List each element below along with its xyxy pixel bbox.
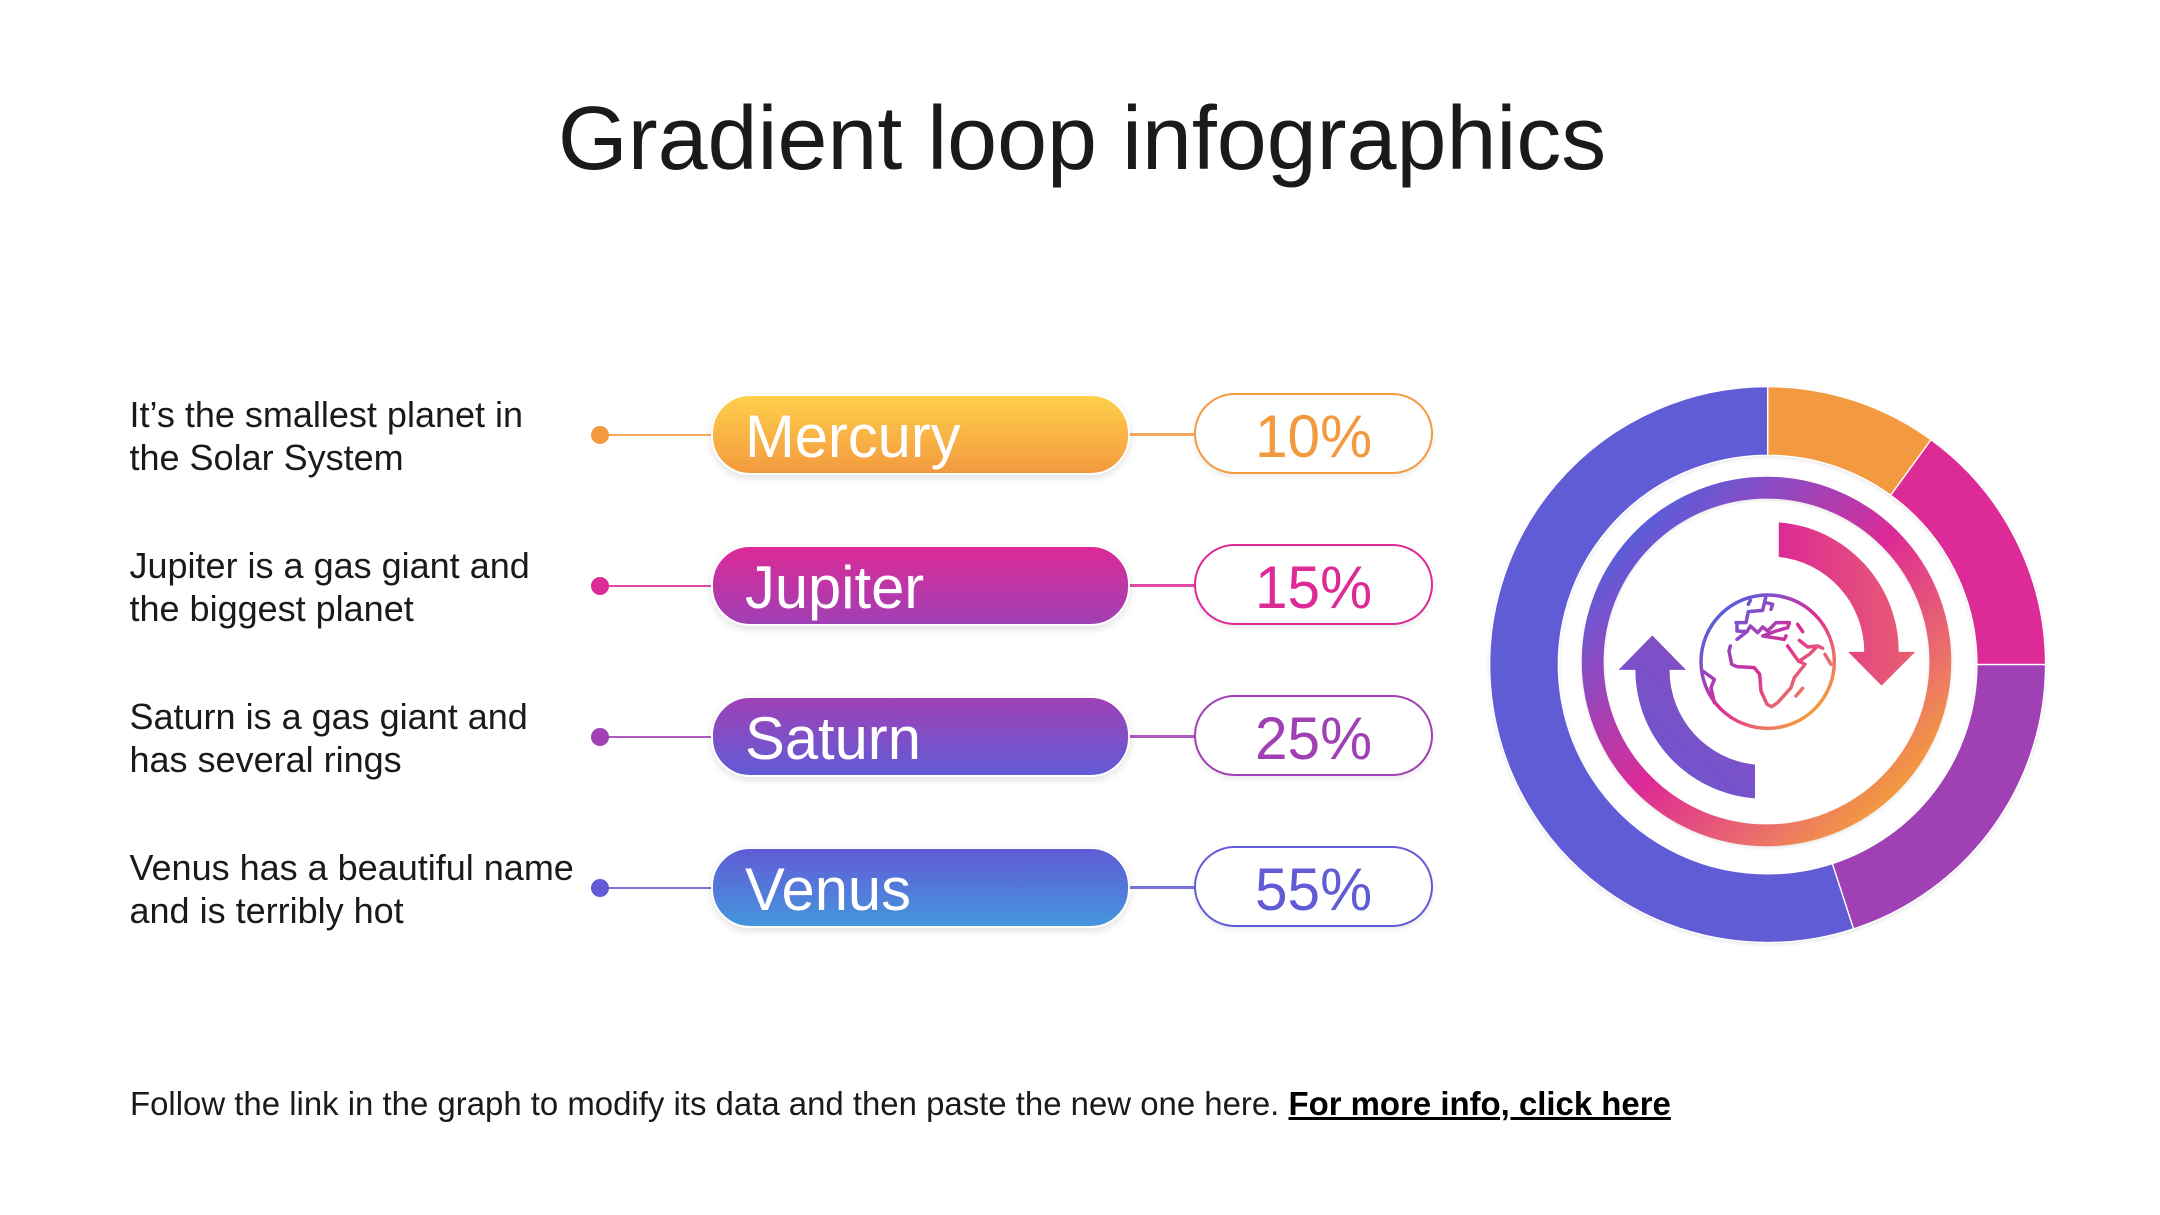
description: Mercury: It’s the smallest planet in	[130, 394, 523, 435]
label pill: Venus	[711, 847, 1130, 928]
description: Saturn	[130, 696, 528, 780]
description: Jupiter	[130, 545, 530, 629]
footer note: Follow the link in the graph to modify its data and then paste the new one here. For more info, click here	[130, 1085, 1671, 1122]
description: Venus: and is terribly hot	[130, 890, 404, 931]
connector line to value: Venus	[1128, 886, 1196, 888]
connector dot: Jupiter	[591, 577, 609, 595]
segment: Saturn 25%	[1832, 665, 2046, 929]
label pill: Saturn	[711, 696, 1130, 777]
description: Saturn: Saturn is a gas giant and	[130, 696, 528, 737]
label pill: Jupiter	[711, 545, 1130, 626]
segment: Venus 55%	[1490, 387, 1854, 943]
row: Mercury	[130, 393, 1433, 480]
value outline: Venus	[1194, 846, 1433, 927]
arrow: clockwise right	[1779, 523, 1915, 686]
segment: Jupiter 15%	[1891, 440, 2046, 665]
connector dot: Venus	[591, 879, 609, 897]
connector line to value: Mercury	[1128, 433, 1196, 436]
icon: globe	[1699, 593, 1836, 730]
connector line: Jupiter	[600, 584, 716, 587]
value outline: Mercury	[1194, 393, 1433, 474]
description: Venus	[130, 847, 574, 931]
row: Saturn	[130, 695, 1433, 782]
connector dot: Saturn	[591, 728, 609, 746]
label pill: Mercury: Mercury	[745, 403, 961, 470]
connector line to value: Jupiter	[1128, 584, 1196, 586]
description: Jupiter: the biggest planet	[130, 588, 414, 629]
connector line to value: Saturn	[1128, 735, 1196, 738]
label pill: Jupiter: Jupiter	[745, 554, 924, 621]
value outline: Jupiter	[1194, 544, 1433, 625]
row: Venus	[130, 846, 1433, 933]
label pill: Saturn: Saturn	[745, 705, 921, 772]
arrow: clockwise left	[1619, 636, 1755, 799]
description: Jupiter: Jupiter is a gas giant and	[130, 545, 530, 586]
value: 10%: 10%	[1254, 402, 1372, 470]
description: Venus: Venus has a beautiful name	[130, 847, 574, 888]
label pill: Mercury	[711, 394, 1130, 475]
inner gradient ring	[1593, 488, 1940, 836]
connector line: Venus	[600, 886, 716, 889]
outer donut segments	[1490, 387, 2046, 943]
segment: Mercury 10%	[1768, 387, 1931, 496]
description: Mercury	[130, 394, 523, 478]
value: 55%: 55%	[1254, 856, 1372, 922]
value outline: Saturn	[1194, 695, 1433, 776]
connector line: Saturn	[600, 736, 716, 738]
connector line: Mercury	[600, 434, 716, 436]
description: Mercury: the Solar System	[130, 437, 404, 478]
title: Gradient loop infographics	[558, 89, 1606, 189]
value: 15%: 15%	[1254, 554, 1372, 620]
label pill: Venus: Venus	[745, 856, 911, 923]
donut chart with loop arrows	[1488, 387, 2047, 946]
row: Jupiter	[130, 544, 1433, 631]
value: 25%: 25%	[1254, 704, 1372, 772]
description: Saturn: has several rings	[130, 739, 402, 780]
connector dot: Mercury	[591, 426, 609, 444]
